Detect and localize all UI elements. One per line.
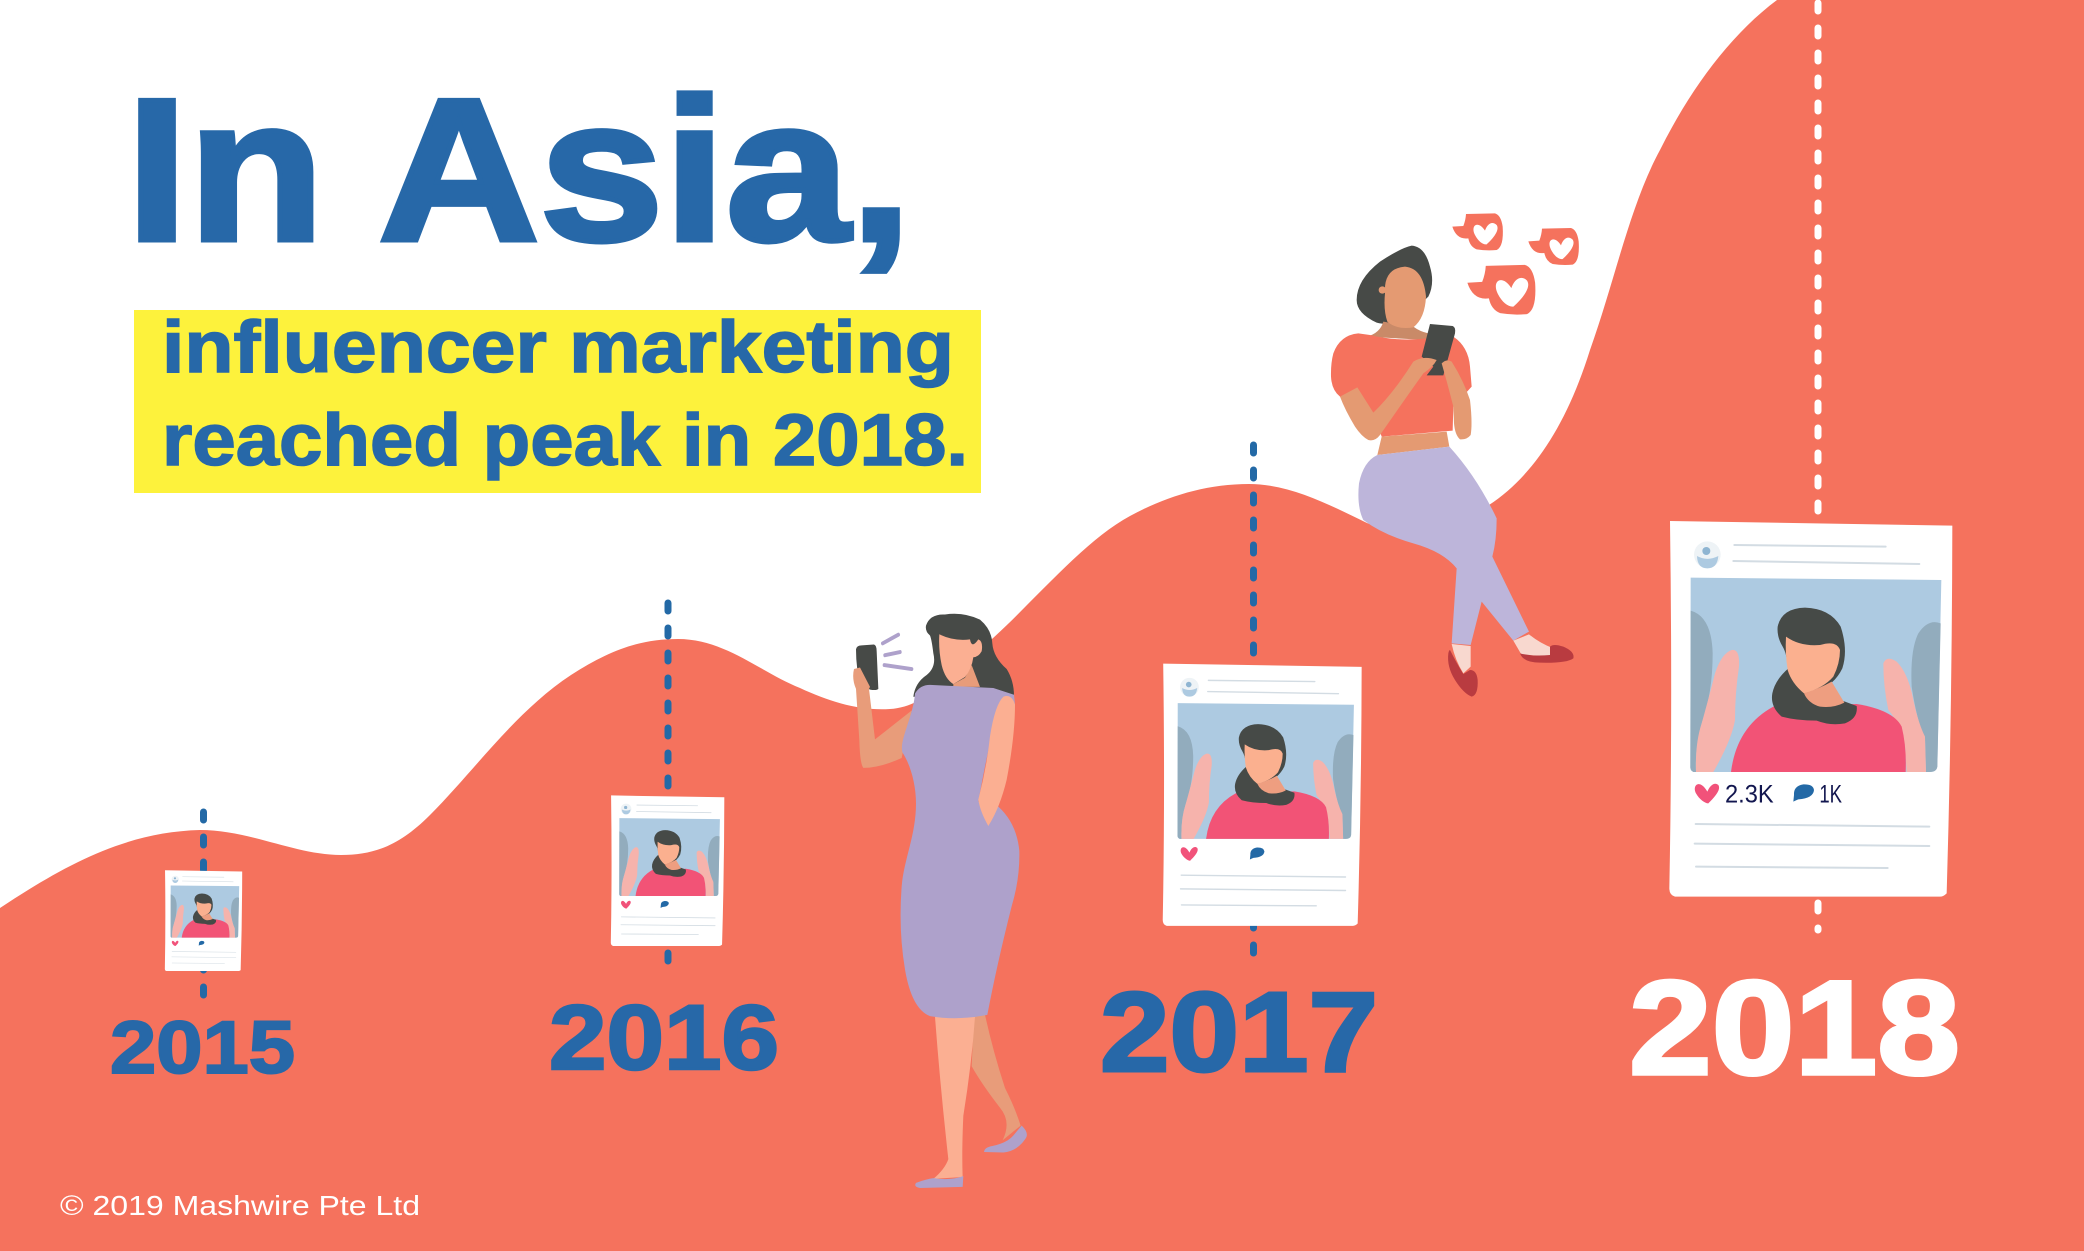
dashed line 2017 xyxy=(1250,445,1257,958)
subtitle highlight: reached peak in 2018. xyxy=(162,400,968,481)
figure: sitting woman with phone xyxy=(1331,213,1579,697)
post 2016 xyxy=(611,795,724,946)
timeline 2016 xyxy=(549,603,779,1089)
subtitle highlight xyxy=(134,307,981,493)
subtitle highlight: influencer marketing xyxy=(162,307,954,388)
likes count: 2.3K xyxy=(1725,782,1774,809)
dashed line 2016 xyxy=(664,603,672,975)
year 2017: 2017 xyxy=(1100,969,1378,1095)
comments count: 1K xyxy=(1819,782,1842,809)
copyright: © 2019 Mashwire Pte Ltd xyxy=(60,1190,420,1221)
icon: heart bubble small right xyxy=(1528,228,1579,265)
year 2015: 2015 xyxy=(110,1006,295,1089)
post 2015 xyxy=(165,870,242,971)
icon: heart bubble large xyxy=(1467,265,1535,315)
timeline 2017 xyxy=(1100,445,1378,1095)
dashed line 2015 xyxy=(200,812,207,995)
dashed line 2018 xyxy=(1814,3,1822,930)
year 2016: 2016 xyxy=(549,987,779,1089)
year 2018: 2018 xyxy=(1629,954,1960,1103)
timeline 2018 xyxy=(1629,3,1960,1103)
figure: standing woman with phone xyxy=(853,614,1027,1188)
icon: heart bubble small left xyxy=(1452,213,1503,250)
title: In Asia, xyxy=(126,57,912,284)
post 2018 xyxy=(1669,521,1952,897)
post 2017 xyxy=(1163,664,1362,926)
timeline 2015 xyxy=(110,812,295,1089)
